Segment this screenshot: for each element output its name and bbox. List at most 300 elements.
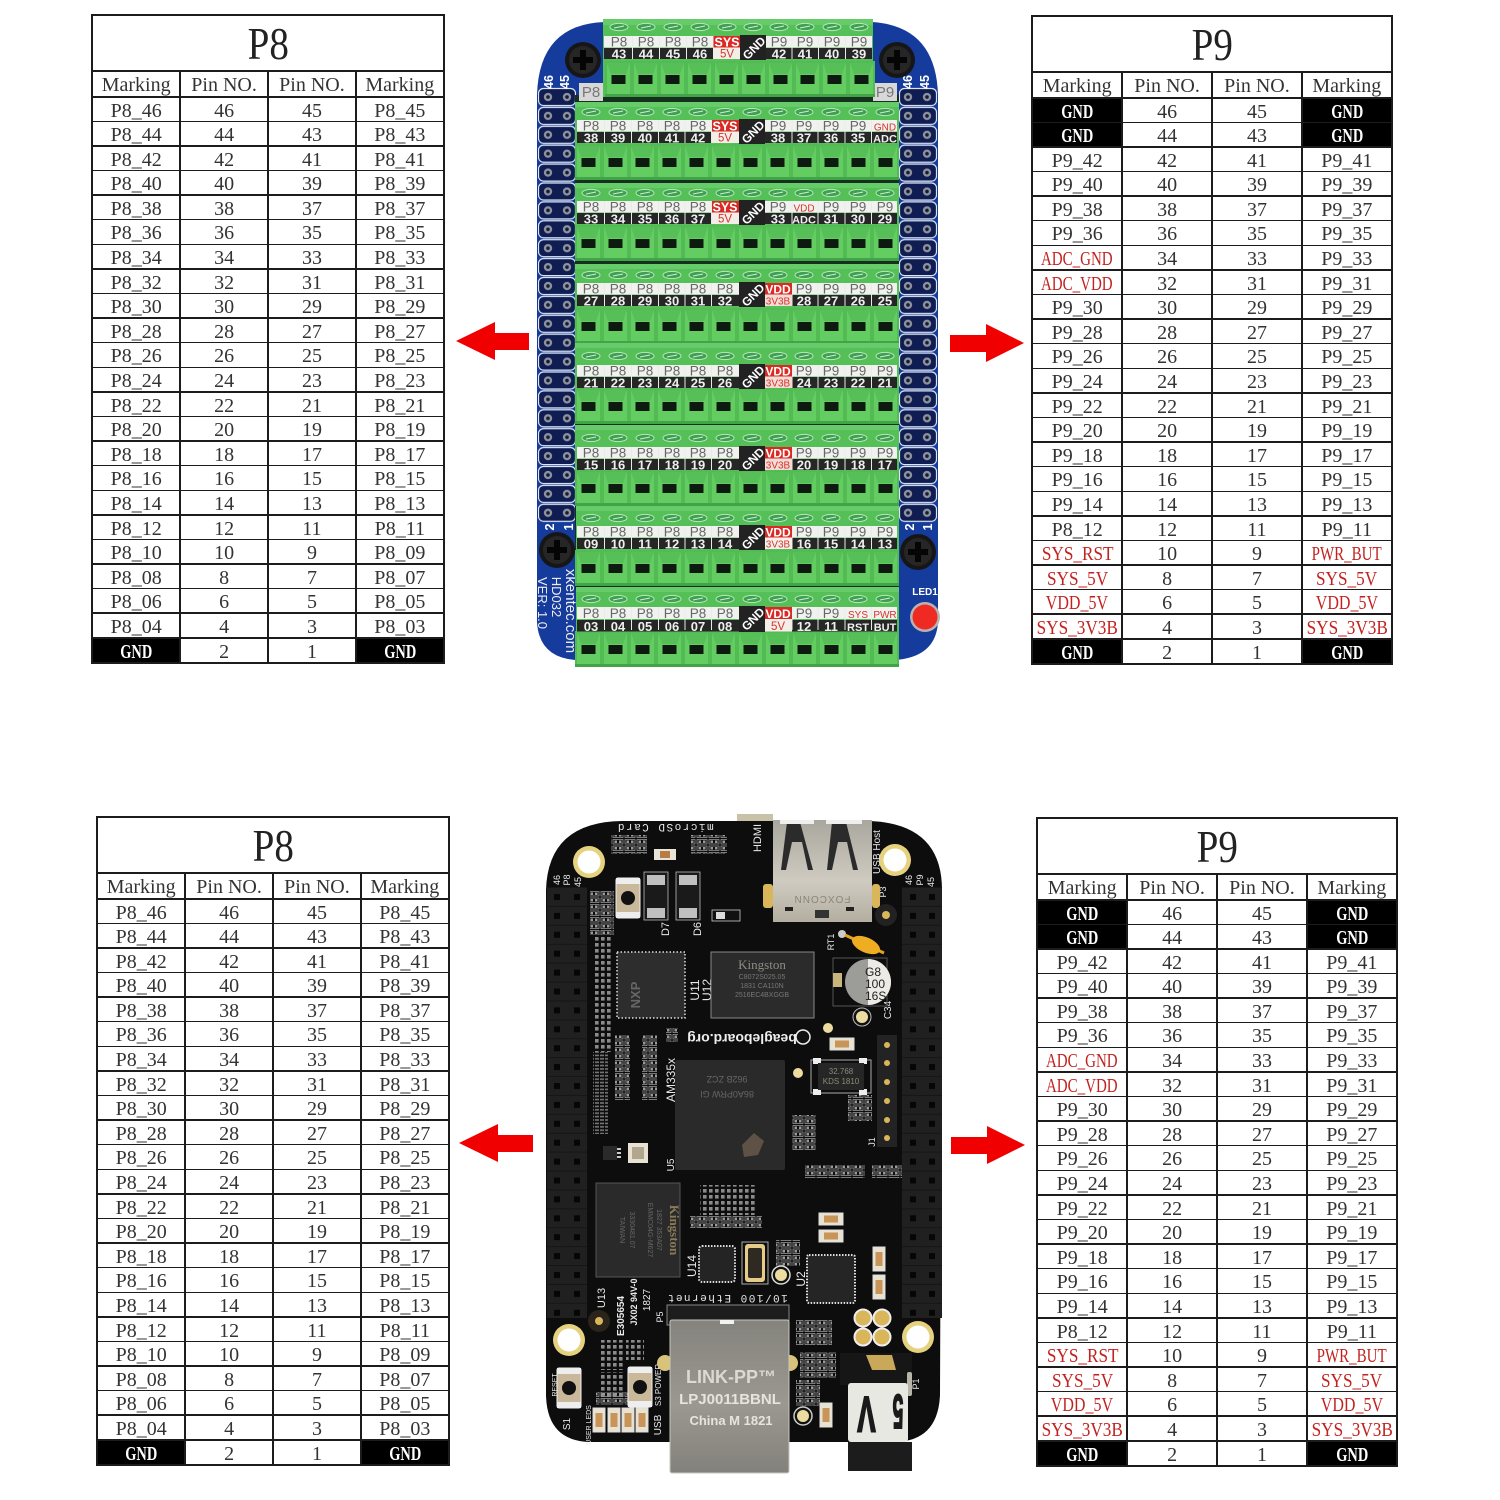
TP9 pad — [772, 1266, 790, 1284]
C55 C11 C12 C9 capacitors — [819, 1213, 885, 1299]
Kingston flash chip: EMMC04G-M627 — [646, 1203, 653, 1257]
terminal row 5: 22 — [851, 376, 865, 390]
silkscreen labels: 46 — [552, 875, 562, 885]
silkscreen labels: S1 — [562, 1417, 573, 1430]
terminal row 2: SYS — [712, 120, 738, 134]
terminal row 7: 14 — [851, 536, 866, 552]
terminal row 7: P9 — [796, 524, 812, 540]
Kingston RAM chip: Kingston — [738, 957, 786, 972]
terminal row 3: P8 — [610, 200, 626, 214]
silkscreen labels: P3 — [878, 886, 888, 898]
terminal row 6: P9 — [877, 446, 893, 460]
terminal row 2: 41 — [665, 130, 679, 146]
arrow: bottom right — [951, 1126, 1025, 1164]
terminal row 7: P9 — [877, 524, 893, 540]
terminal row 8: P9 — [796, 606, 812, 621]
table: top P9 — [1031, 15, 1393, 665]
electrolytic capacitor: G8 — [865, 965, 881, 979]
silkscreen labels: 45 — [926, 877, 936, 887]
pin rows — [98, 900, 448, 1464]
silkscreen labels: microSD Card — [616, 820, 714, 832]
terminal shield board — [535, 19, 940, 667]
terminal row 5: 24 — [665, 376, 680, 390]
terminal row 5: P8 — [583, 364, 599, 378]
terminal row 3: 29 — [878, 212, 892, 226]
terminal row 5: 25 — [691, 376, 705, 390]
terminal row 3 — [575, 183, 899, 261]
silkscreen labels: 46 — [904, 875, 914, 885]
header row: Marking — [102, 74, 171, 96]
terminal row 7: 3V3B — [766, 540, 791, 550]
C36 capacitor — [830, 1038, 854, 1050]
terminal row 8: 5V — [771, 621, 785, 633]
pin rows — [93, 98, 443, 662]
terminal row 4: P8 — [664, 282, 680, 296]
terminal row 7: 11 — [638, 536, 652, 552]
U2 chip — [807, 1255, 855, 1303]
terminal row 1: SYS — [714, 36, 740, 50]
terminal row 5: 23 — [824, 376, 838, 390]
terminal row 7: 14 — [718, 536, 733, 552]
silkscreen labels: U2 — [794, 1271, 808, 1287]
silkscreen labels: HDMI — [752, 824, 764, 852]
power jack: 5 — [893, 1384, 903, 1438]
header row: Marking — [1317, 877, 1386, 899]
header row: Marking — [370, 876, 439, 898]
D6 diode array — [676, 872, 700, 920]
terminal row 4: GND — [739, 281, 768, 310]
terminal row 7: 13 — [691, 536, 705, 552]
terminal row 1: 42 — [772, 46, 786, 62]
silkscreen labels: P1 — [911, 1378, 921, 1390]
terminal row 8: 07 — [691, 619, 705, 634]
terminal row 1: P8 — [611, 34, 627, 50]
P8 title — [98, 818, 448, 872]
terminal row 5: P8 — [717, 364, 733, 378]
terminal row 4: 31 — [691, 294, 705, 308]
silkscreen labels: USB Host — [872, 830, 883, 874]
J1 serial header — [877, 1035, 897, 1147]
P8 title: P8 — [252, 820, 294, 871]
terminal row 2: P9 — [796, 118, 812, 134]
terminal row 1: 40 — [825, 46, 839, 62]
silkscreen labels: P5 — [655, 1311, 665, 1323]
terminal row 8: PWR — [873, 610, 897, 621]
power jack: V — [857, 1386, 876, 1443]
board text: xkentec.com — [562, 569, 579, 653]
RT1 yellow component — [838, 930, 884, 958]
board text: VER: 1.0 — [535, 577, 550, 629]
header pin numbers: 2 — [903, 523, 917, 530]
terminal row 1: 45 — [666, 46, 680, 62]
P8 title: P8 — [247, 18, 289, 69]
Kingston flash chip: Kingston — [667, 1205, 682, 1256]
header row: Pin NO. — [196, 876, 262, 898]
terminal row 8: 12 — [797, 619, 811, 634]
pin rows — [1033, 99, 1391, 663]
Y3 crystal — [742, 1242, 768, 1284]
terminal row 8: BUT — [874, 622, 897, 634]
terminal row 7: GND — [739, 524, 768, 553]
terminal row 4: P9 — [796, 282, 812, 296]
terminal row 2: P9 — [770, 118, 786, 134]
silkscreen labels: USER LEDS — [586, 1405, 593, 1445]
AM335x processor: 86A0PRW GI — [700, 1089, 754, 1099]
silkscreen labels: D7 — [660, 922, 672, 936]
TP4 and power LED — [794, 1403, 832, 1427]
terminal row 3: 5V — [718, 214, 732, 226]
terminal row 5: P8 — [664, 364, 680, 378]
AM335x processor: 962B ZCZ — [706, 1074, 748, 1084]
LED1: LED1 — [912, 587, 938, 598]
table: top P8 — [91, 14, 445, 664]
terminal row 5: VDD — [765, 364, 791, 378]
terminal row 1: P8 — [638, 34, 654, 50]
silkscreen labels: U11 — [688, 979, 702, 1001]
terminal row 2: ADC — [873, 134, 897, 146]
mounting screws — [539, 42, 936, 570]
terminal row 3: 37 — [691, 212, 705, 226]
terminal row 8: 06 — [665, 619, 679, 634]
mounting holes — [553, 844, 934, 1356]
terminal row 5: 21 — [584, 376, 598, 390]
terminal row 5: P8 — [690, 364, 706, 378]
USB host connector — [763, 820, 880, 922]
terminal row 3: VDD — [793, 204, 815, 214]
Kingston RAM chip — [711, 952, 814, 1018]
terminal row 8 — [575, 587, 899, 667]
header row: Pin NO. — [1229, 877, 1295, 899]
terminal row 5: P9 — [877, 364, 893, 378]
terminal row 7: P8 — [717, 524, 733, 540]
terminal row 8: RST — [847, 622, 869, 634]
terminal row 4: 25 — [878, 294, 892, 308]
terminal row 4: 26 — [851, 294, 865, 308]
header row: Marking — [365, 74, 434, 96]
terminal row 6: P8 — [690, 446, 706, 460]
terminal row 7: VDD — [765, 526, 791, 540]
P9 tag: P9 — [876, 84, 894, 101]
terminal row 3: P9 — [823, 200, 839, 214]
Kingston RAM chip: C8072S025.05 — [739, 974, 785, 981]
terminal row 3: 33 — [584, 212, 598, 226]
terminal row 7: 09 — [584, 536, 598, 552]
terminal row 8: P8 — [717, 606, 733, 621]
terminal row 3: 33 — [771, 212, 785, 226]
electrolytic capacitor: 16S — [865, 989, 886, 1003]
terminal row 6: P9 — [796, 446, 812, 460]
P9 title: P9 — [1191, 19, 1233, 70]
Kingston flash chip: 1827 353A07 — [655, 1209, 662, 1251]
terminal row 1: P9 — [824, 34, 840, 50]
terminal row 8: 04 — [611, 619, 626, 634]
header pin numbers: 1 — [921, 523, 935, 530]
silkscreen labels: C34 — [883, 1000, 894, 1019]
AM335x processor — [675, 1060, 785, 1170]
terminal row 5: GND — [739, 363, 768, 392]
silkscreen labels: U14 — [685, 1255, 699, 1277]
terminal row 8: P8 — [664, 606, 680, 621]
silkscreen labels: J1 — [867, 1137, 877, 1147]
header pin numbers: 1 — [562, 523, 576, 530]
U14 ethernet PHY — [699, 1246, 735, 1282]
terminal row 8: VDD — [765, 607, 791, 621]
right header pads — [899, 88, 937, 522]
silkscreen labels — [552, 820, 936, 1445]
header row: Pin NO. — [1134, 75, 1200, 97]
terminal row 5: 3V3B — [766, 378, 791, 390]
terminal row 6: P8 — [637, 446, 653, 460]
terminal row 3: SYS — [712, 200, 738, 214]
terminal row 2: 37 — [797, 130, 811, 146]
terminal row 4: 28 — [611, 294, 625, 308]
header row: Marking — [107, 876, 176, 898]
electrolytic capacitor: 100 — [865, 977, 885, 991]
terminal row 2: P8 — [583, 118, 599, 134]
header row: Marking — [1048, 877, 1117, 899]
BeagleBone board — [546, 814, 942, 1473]
terminal row 2: P9 — [823, 118, 839, 134]
terminal row 3: 30 — [851, 212, 865, 226]
terminal row 6: P8 — [664, 446, 680, 460]
ethernet connector — [657, 1305, 798, 1473]
terminal row 7: P8 — [583, 524, 599, 540]
terminal row 8: P8 — [583, 606, 599, 621]
terminal row 3: P9 — [850, 200, 866, 214]
table: bottom P9 — [1036, 817, 1398, 1467]
silkscreen labels: D6 — [692, 922, 704, 936]
S2 button — [616, 878, 640, 918]
silkscreen labels: P8 — [562, 874, 572, 886]
user LEDs — [593, 1408, 648, 1432]
terminal row 5: 22 — [611, 376, 625, 390]
NXP chip — [617, 952, 685, 1018]
U3 chip — [603, 1146, 621, 1160]
terminal row 4: P8 — [637, 282, 653, 296]
terminal row 1: P9 — [771, 34, 787, 50]
silkscreen labels: U12 — [700, 979, 714, 1001]
black PCB — [546, 821, 942, 1442]
header row — [98, 874, 448, 898]
P3 test pad — [875, 904, 897, 926]
TP pad cluster — [854, 1310, 890, 1346]
Y1 crystal — [811, 1058, 871, 1095]
arrow: top left — [456, 322, 529, 360]
terminal row 2: 38 — [771, 130, 785, 146]
terminal row 6: 19 — [824, 458, 838, 472]
terminal row 4: P8 — [690, 282, 706, 296]
terminal row 2: 36 — [824, 130, 838, 146]
terminal row 6: VDD — [765, 446, 791, 460]
ethernet connector: LINK-PP™ — [686, 1367, 776, 1387]
terminal row 4: 30 — [665, 294, 679, 308]
header pin numbers: 45 — [918, 75, 932, 89]
terminal row 5: P9 — [796, 364, 812, 378]
header row: Pin NO. — [284, 876, 350, 898]
terminal row 6: 20 — [797, 458, 811, 472]
ethernet connector: China M 1821 — [689, 1413, 773, 1428]
header row: Pin NO. — [279, 74, 345, 96]
terminal row 1: P8 — [665, 34, 681, 50]
terminal row 3: GND — [739, 199, 768, 228]
terminal row 6: 20 — [718, 458, 732, 472]
terminal row 5 — [575, 343, 899, 424]
P9 header — [902, 887, 942, 1318]
terminal row 3: P9 — [877, 200, 893, 214]
board text: HD032 — [549, 577, 564, 617]
terminal row 2: P8 — [664, 118, 680, 134]
terminal row 6: P8 — [610, 446, 626, 460]
terminal row 4: 32 — [718, 294, 732, 308]
terminal row 8: 03 — [584, 619, 598, 634]
terminal row 7: P8 — [690, 524, 706, 540]
terminal row 3: ADC — [792, 214, 816, 226]
terminal row 4 — [575, 264, 899, 344]
terminal row 6: P8 — [717, 446, 733, 460]
terminal row 2: 39 — [611, 130, 625, 146]
terminal row 8: GND — [739, 605, 768, 634]
terminal row 4: P8 — [610, 282, 626, 296]
terminal row 2: GND — [874, 122, 896, 134]
terminal row 8: P8 — [637, 606, 653, 621]
terminal row 1: 41 — [798, 46, 812, 62]
terminal row 2: P8 — [690, 118, 706, 134]
terminal row 7: P8 — [610, 524, 626, 540]
test pads TP — [793, 1008, 871, 1078]
terminal row 4: 29 — [638, 294, 652, 308]
terminal row 4: P9 — [877, 282, 893, 296]
silkscreen labels: 1827 — [642, 1288, 653, 1311]
terminal row 2: P9 — [850, 118, 866, 134]
terminal row 2: 38 — [584, 130, 598, 146]
terminal row 5: 26 — [718, 376, 732, 390]
silkscreen labels: U5 — [666, 1158, 677, 1171]
terminal row 1: P8 — [692, 34, 708, 50]
terminal row 2: P8 — [637, 118, 653, 134]
header row: Marking — [1043, 75, 1112, 97]
terminal row 5: 24 — [797, 376, 812, 390]
terminal row 1: 46 — [693, 46, 707, 62]
U4 regulator — [628, 1143, 648, 1163]
terminal row 1: 5V — [720, 48, 734, 60]
beagleboard.org logo: beagleboard.org — [687, 1031, 797, 1047]
terminal row 2: 35 — [851, 130, 865, 146]
terminal row 8: 05 — [638, 619, 652, 634]
terminal row 5: P9 — [823, 364, 839, 378]
terminal block shadow — [575, 95, 899, 590]
terminal row 6: 16 — [611, 458, 625, 472]
header pin numbers: 46 — [901, 75, 915, 89]
silkscreen labels: RESET — [552, 1373, 559, 1397]
board text — [535, 569, 579, 653]
terminal row 8: 08 — [718, 619, 732, 634]
silkscreen labels: U13 — [596, 1288, 608, 1308]
Y1 crystal: KDS 1810 — [823, 1077, 860, 1086]
P9 title — [1038, 819, 1396, 873]
terminal row 8: P8 — [690, 606, 706, 621]
P8 title — [93, 16, 443, 70]
header pin numbers: 2 — [543, 523, 557, 530]
silkscreen labels: JX02 94V-0 — [629, 1278, 639, 1326]
terminal row 4: P9 — [823, 282, 839, 296]
table: bottom P8 — [96, 816, 450, 1466]
terminal row 3: P8 — [664, 200, 680, 214]
P8 header — [547, 887, 587, 1318]
header row: Pin NO. — [1139, 877, 1205, 899]
silkscreen labels: P9 — [915, 874, 925, 886]
terminal row 3: P8 — [637, 200, 653, 214]
terminal row 4: 3V3B — [766, 296, 791, 308]
terminal row 2: 5V — [718, 132, 732, 144]
terminal row 6: 3V3B — [766, 460, 791, 472]
power jack — [840, 1353, 912, 1471]
header row: Marking — [1312, 75, 1381, 97]
terminal row 8: 11 — [824, 619, 838, 634]
P5 pad — [588, 1310, 610, 1332]
terminal row 7: P9 — [850, 524, 866, 540]
buttons — [557, 1367, 652, 1408]
terminal row 8: SYS — [848, 610, 868, 621]
terminal row 7: 12 — [665, 536, 679, 552]
terminal row 6: 18 — [851, 458, 865, 472]
arrow: top right — [950, 324, 1024, 362]
terminal row 6: 17 — [638, 458, 652, 472]
header row: Pin NO. — [1224, 75, 1290, 97]
terminal row 5: P8 — [637, 364, 653, 378]
terminal row 7: 13 — [878, 536, 892, 552]
terminal row 6 — [575, 425, 899, 506]
header row — [1038, 875, 1396, 899]
terminal row 3: P8 — [583, 200, 599, 214]
silkscreen labels: E305654 — [616, 1296, 627, 1336]
silkscreen labels: USB — [653, 1414, 664, 1435]
terminal row 5: P8 — [610, 364, 626, 378]
terminal row 2: GND — [739, 118, 768, 147]
terminal row 2: P8 — [610, 118, 626, 134]
Kingston flash chip: 3330481.07 — [628, 1212, 635, 1249]
terminal row 4: P8 — [583, 282, 599, 296]
terminal row 7: P8 — [637, 524, 653, 540]
NXP chip: NXP — [628, 981, 643, 1008]
terminal row 5: 21 — [878, 376, 892, 390]
terminal row 5: P9 — [850, 364, 866, 378]
terminal row 7: P9 — [823, 524, 839, 540]
Kingston RAM chip: 2516EC4BXGGB — [735, 992, 789, 999]
terminal row 7: 16 — [797, 536, 811, 552]
terminal row 1: P9 — [851, 34, 867, 50]
terminal row 4: VDD — [765, 282, 791, 296]
header row — [93, 72, 443, 96]
blue PCB outline — [537, 22, 938, 660]
LED1 — [910, 587, 940, 632]
terminal row 8: P8 — [610, 606, 626, 621]
P9 title: P9 — [1196, 821, 1238, 872]
terminal row 2: 40 — [638, 130, 652, 146]
Kingston flash chip: TAIWAN — [618, 1217, 625, 1243]
terminal row 1: P9 — [797, 34, 813, 50]
terminal row 4: 27 — [824, 294, 838, 308]
terminal row 3: 34 — [611, 212, 626, 226]
header pin numbers: 46 — [542, 75, 556, 89]
P8 tag: P8 — [582, 84, 600, 101]
terminal row 3: 31 — [824, 212, 838, 226]
terminal row 6: GND — [739, 445, 768, 474]
silkscreen labels: S3 POWER — [654, 1364, 663, 1406]
Kingston RAM chip: 1831 CA110N — [740, 983, 784, 990]
header row — [1033, 73, 1391, 97]
P9 title — [1033, 17, 1391, 71]
header row: Pin NO. — [191, 74, 257, 96]
